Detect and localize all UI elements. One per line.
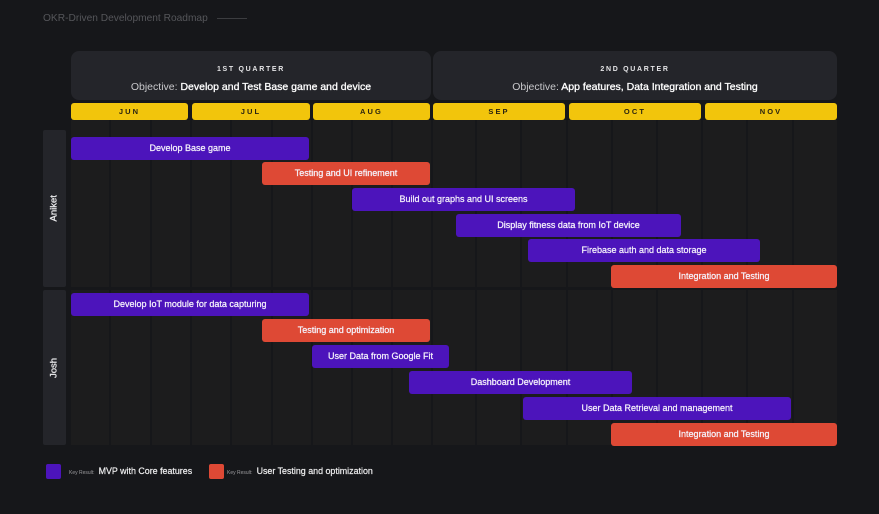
bar: Integration and Testing: Integration and Testing (679, 271, 769, 281)
legend: MVP with Core features: Key Result: MVP with Core features (69, 466, 192, 476)
bar: Develop IoT module for data capturing: Develop IoT module for data capturing (114, 298, 266, 308)
bar: User Data Retrieval and management: User Data Retrieval and management (581, 402, 733, 412)
bar: User Data from Google Fit: User Data from Google Fit (328, 350, 433, 360)
legend: MVP with Core features (46, 464, 192, 479)
bar: Dashboard Development: Dashboard Development (471, 376, 570, 386)
panel: 1st quarter header (71, 51, 431, 100)
row label: Josh (43, 290, 66, 445)
month headers: NOV (760, 107, 782, 116)
row label: Aniket: Aniket (48, 195, 60, 221)
row label: Josh: Josh (48, 357, 60, 378)
panel: 2nd quarter header: Objective: App features, Data Integration and Testing (512, 80, 758, 92)
bar: Display fitness data from IoT device (456, 214, 681, 236)
panel: 2nd quarter header: 2ND QUARTER (600, 66, 670, 72)
bar: Dashboard Development (409, 370, 632, 394)
panel: 1st quarter header: Objective: Develop and Test Base game and device (131, 80, 371, 92)
bar: Display fitness data from IoT device: Display fitness data from IoT device (497, 220, 640, 230)
bar: Integration and Testing (611, 423, 837, 446)
bar: Develop IoT module for data capturing (71, 292, 309, 316)
bar: Develop Base game: Develop Base game (149, 142, 231, 152)
legend: User Testing and optimization: Key Result: User Testing and optimization (227, 466, 373, 476)
month headers: SEP (488, 107, 510, 116)
panel: 2nd quarter header (433, 51, 837, 100)
bar: Firebase auth and data storage (528, 239, 760, 262)
bar: User Data from Google Fit (312, 344, 449, 368)
bar: Build out graphs and UI screens (352, 188, 575, 211)
bar: Testing and optimization: Testing and optimization (298, 324, 394, 334)
bar: Integration and Testing: Integration and Testing (679, 429, 769, 439)
bar: Testing and optimization (262, 318, 430, 342)
title: OKR-Driven Development Roadmap (43, 12, 208, 24)
bar: Develop Base game (71, 136, 309, 160)
row label: Aniket (43, 130, 66, 287)
panel: 1st quarter header: 1ST QUARTER (217, 66, 285, 72)
month headers: JUN (119, 107, 140, 116)
bar: Testing and UI refinement (262, 162, 430, 185)
legend: User Testing and optimization (209, 464, 373, 479)
month headers: OCT (624, 107, 646, 116)
bar: Integration and Testing (611, 265, 837, 288)
month headers (71, 103, 837, 120)
bar: User Data Retrieval and management (523, 396, 791, 420)
month headers: AUG (360, 107, 383, 116)
month headers: JUL (241, 107, 261, 116)
bar: Firebase auth and data storage: Firebase auth and data storage (581, 245, 707, 255)
bar: Testing and UI refinement: Testing and UI refinement (295, 168, 397, 178)
bar: Build out graphs and UI screens: Build out graphs and UI screens (399, 194, 528, 204)
